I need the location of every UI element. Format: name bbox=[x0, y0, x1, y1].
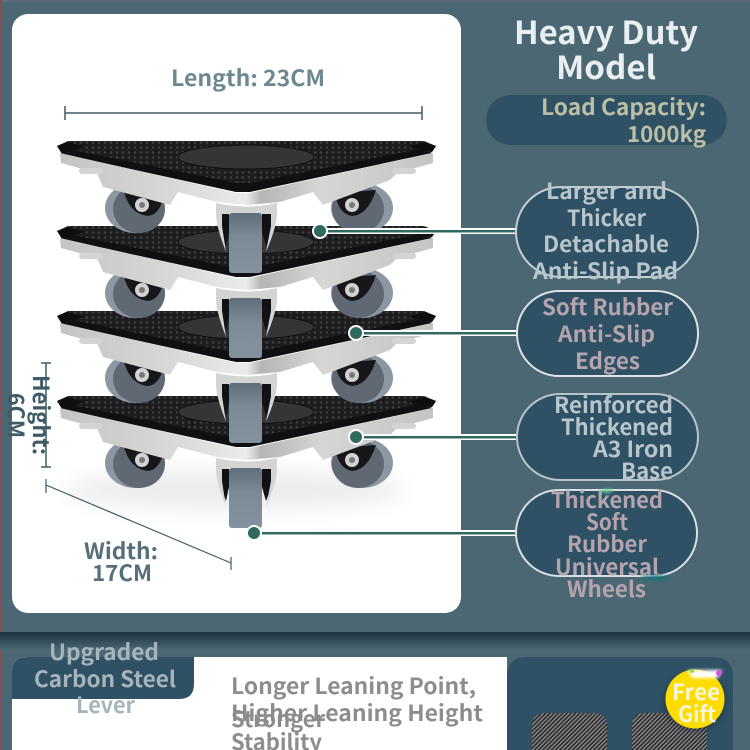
callout: universal wheels: Soft bbox=[586, 505, 628, 537]
colour speck: bottom of wheels callout bbox=[641, 576, 669, 580]
lever description: Longer Leaning Point, bbox=[231, 669, 476, 701]
callout connector: wheels bbox=[246, 525, 516, 541]
title: Model bbox=[556, 43, 656, 89]
callout: universal wheels: Rubber bbox=[567, 527, 647, 559]
callout: rubber edges: Anti-Slip bbox=[557, 317, 655, 349]
callout: anti-slip pad: Detachable bbox=[543, 227, 669, 259]
gift pad right bbox=[632, 713, 707, 750]
callout: iron base: Base bbox=[621, 454, 673, 486]
load capacity pill bbox=[486, 90, 727, 149]
callout: universal wheels: Universal bbox=[555, 550, 659, 582]
callout: universal wheels: Wheels bbox=[567, 572, 646, 604]
title: Heavy Duty bbox=[514, 8, 698, 54]
length dimension line bbox=[65, 106, 422, 120]
lever heading: Lever bbox=[76, 688, 135, 720]
top edge line bbox=[0, 0, 750, 2]
height label: Height: bbox=[26, 375, 58, 455]
height label: 6CM bbox=[1, 393, 33, 438]
floor shadow bbox=[65, 470, 405, 510]
left edge line bbox=[0, 0, 2, 750]
lever description: Stronger bbox=[231, 702, 325, 734]
panel shadow band bbox=[0, 632, 750, 650]
callout: iron base: A3 Iron bbox=[592, 432, 673, 464]
callout: anti-slip pad: Thicker bbox=[567, 201, 646, 233]
lever heading: Upgraded bbox=[49, 635, 159, 667]
height dimension line bbox=[41, 363, 51, 467]
panel: product dimensions bbox=[12, 14, 461, 613]
callout: anti-slip pad bbox=[516, 174, 698, 286]
width label: Width: bbox=[84, 534, 158, 566]
callout: anti-slip pad: Anti-Slip Pad bbox=[532, 254, 678, 286]
lever description: Higher Leaning Height bbox=[231, 696, 483, 728]
callout: iron base bbox=[517, 388, 698, 486]
height label bbox=[1, 375, 58, 455]
free gift badge: Gift bbox=[678, 697, 716, 729]
lever description bbox=[231, 669, 483, 750]
panel: lever bbox=[12, 635, 507, 750]
callout: iron base: Reinforced bbox=[554, 388, 673, 420]
width label: 17CM bbox=[92, 556, 152, 588]
free gift badge: Free bbox=[672, 675, 720, 707]
callout: universal wheels bbox=[516, 483, 697, 604]
callout connector: base bbox=[348, 429, 516, 445]
lever heading bbox=[34, 635, 176, 720]
callout: iron base: Thickened bbox=[561, 410, 673, 442]
product: stacked dollies bbox=[57, 141, 436, 528]
load capacity pill: Load Capacity: bbox=[541, 90, 706, 122]
callout: anti-slip pad: Larger and bbox=[546, 174, 667, 206]
length label: Length: 23CM bbox=[171, 61, 325, 93]
lever heading: Carbon Steel bbox=[34, 662, 176, 694]
width dimension line bbox=[46, 479, 231, 570]
width label bbox=[84, 534, 158, 588]
colour speck: top of wheels callout bbox=[601, 489, 613, 493]
callout connector: edges bbox=[348, 325, 516, 341]
panel: free gift bbox=[507, 657, 733, 750]
callout connector: pad bbox=[312, 223, 516, 239]
callout: rubber edges: Soft Rubber bbox=[542, 290, 673, 322]
free gift badge bbox=[662, 669, 728, 732]
lever heading pill bbox=[12, 657, 194, 699]
callout: rubber edges bbox=[517, 290, 698, 376]
title bbox=[514, 8, 698, 89]
gift pad left bbox=[532, 713, 607, 750]
callout: rubber edges: Edges bbox=[575, 344, 640, 376]
load capacity pill: 1000kg bbox=[627, 117, 706, 149]
callout: universal wheels: Thickened bbox=[551, 483, 663, 515]
